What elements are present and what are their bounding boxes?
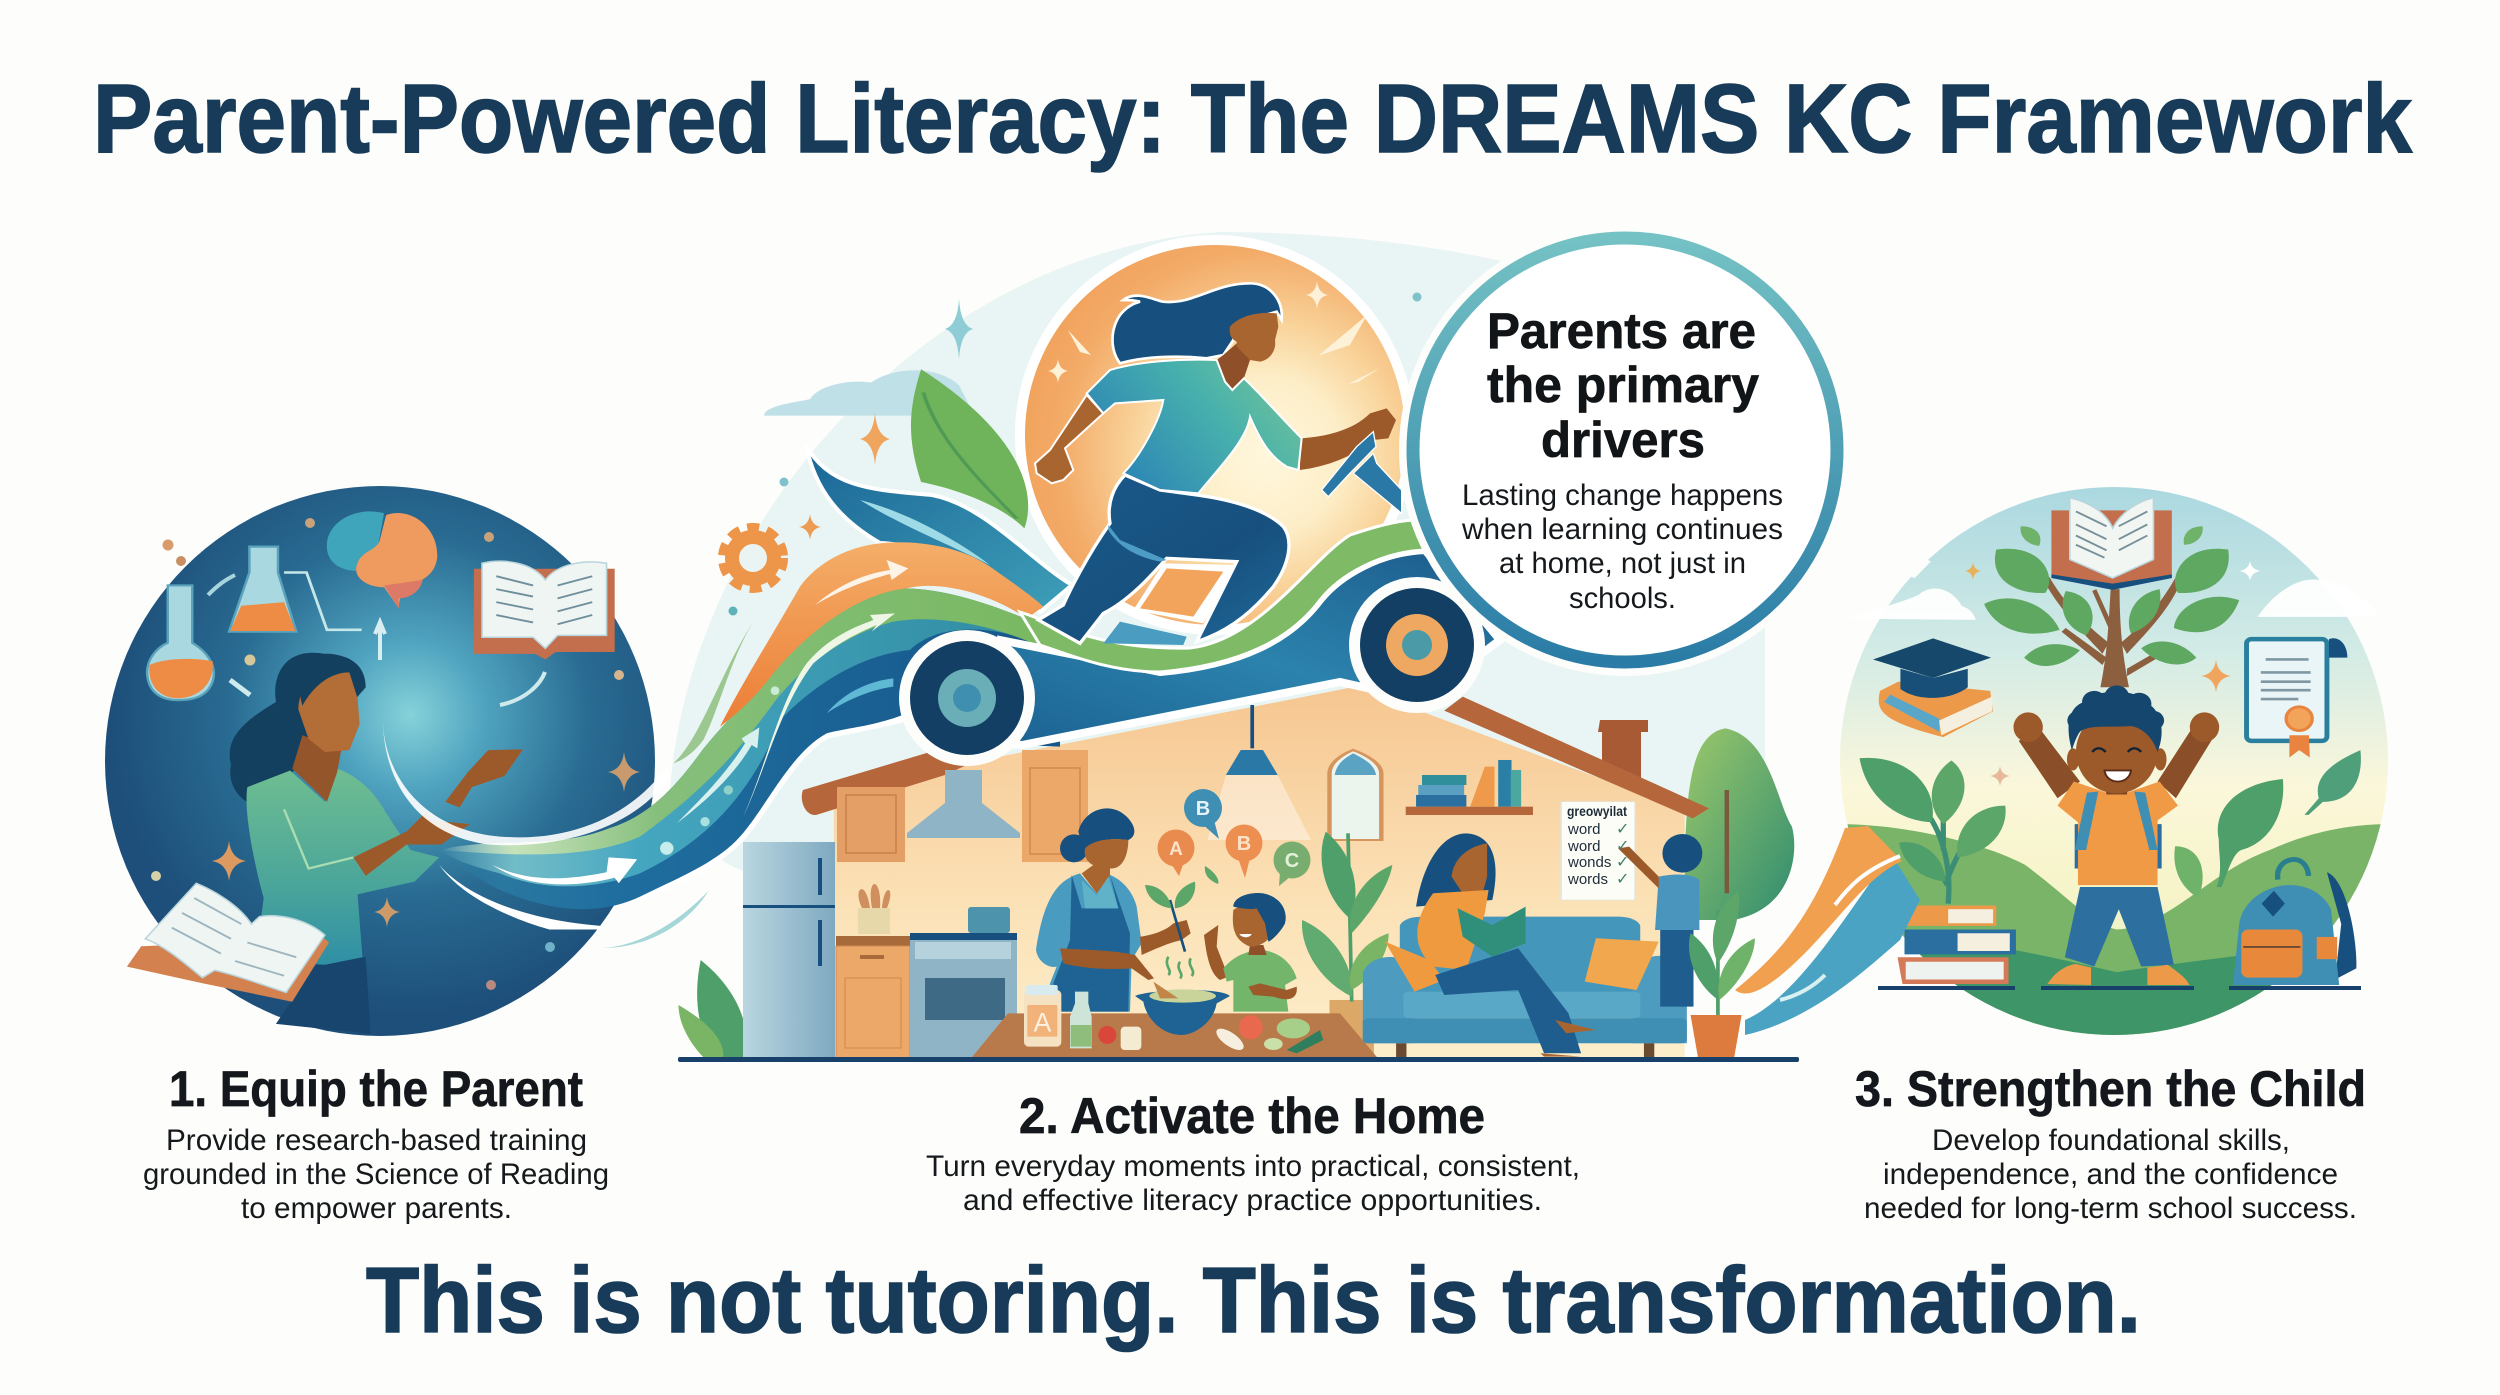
right wheel: [1349, 577, 1485, 713]
icon: diploma: [2247, 638, 2347, 758]
callout circle: [1399, 224, 1851, 676]
panel: equip the parent: [105, 486, 655, 1036]
checklist text: ✓: [1616, 838, 1629, 855]
checklist text: ✓: [1616, 871, 1629, 888]
sparkles and gear: [722, 281, 1422, 616]
right arm: [1300, 408, 1396, 470]
kitchen table with food: A: [1033, 1008, 1051, 1038]
icon: backpack: [2233, 859, 2356, 985]
step 3 heading: 3. Strengthen the Child: [1855, 1061, 2366, 1117]
closing statement: This is not tutoring. This is transformation.: [366, 1248, 2141, 1352]
flowing ribbon from parent to car: [440, 588, 1060, 909]
child with raised arms: [2013, 685, 2219, 985]
icon: open book bottom: [127, 883, 329, 1002]
step 1 description: Provide research-based training: [166, 1124, 587, 1157]
blue sofa: [1363, 917, 1687, 1058]
panel: activate the home: [670, 232, 1799, 1062]
icon: round flask: [147, 585, 214, 700]
checklist text: words: [1567, 871, 1608, 888]
panel: strengthen the child: [1735, 487, 2388, 1042]
running parent figure: [1035, 283, 1402, 645]
step 3 description: Develop foundational skills,: [1932, 1124, 2290, 1157]
shirt: [1087, 360, 1302, 493]
cooking parent: [1036, 808, 1195, 1012]
plant outside left: [678, 960, 747, 1058]
callout heading: [1487, 303, 1759, 468]
kitchen table with food: [971, 957, 1378, 1058]
child helping: [1204, 893, 1297, 1012]
callout body: at home, not just in: [1499, 547, 1746, 580]
potted plant right: [1689, 892, 1755, 1057]
step 2 description: [926, 1150, 1580, 1217]
step 1 heading: 1. Equip the Parent: [169, 1061, 583, 1117]
step 2 description: and effective literacy practice opportunities.: [963, 1184, 1542, 1217]
blue wave leaf: [806, 445, 1072, 612]
flowing ribbon into child circle: [1735, 826, 1920, 1035]
parent reading on sofa: [1416, 833, 1596, 1057]
potted plant middle: [1302, 832, 1392, 1057]
orange band: [720, 542, 1043, 727]
alphabet speech bubbles: B: [1196, 798, 1210, 820]
tree with leaves: [1984, 526, 2239, 687]
alphabet speech bubbles: [1158, 789, 1310, 886]
right side plants: [2174, 750, 2361, 898]
sprouting plant on books: [1860, 758, 2006, 904]
icon: stack of books: [1898, 906, 2016, 984]
child at checklist: [1561, 802, 1702, 1007]
figure: parent teaching: [230, 653, 523, 1034]
step 3 description: independence, and the confidence: [1883, 1158, 2338, 1191]
pants stripe: [1108, 525, 1167, 562]
callout heading: the primary: [1487, 357, 1759, 413]
icon: conical flask: [229, 547, 362, 632]
step 3 description: [1864, 1124, 2357, 1225]
callout heading: Parents are: [1487, 303, 1756, 359]
neck: [1217, 343, 1250, 390]
window: [1330, 750, 1381, 840]
sun circle: [1020, 240, 1410, 630]
sky dome: [670, 232, 1765, 880]
alphabet speech bubbles: C: [1285, 850, 1299, 872]
callout body: [1461, 479, 1783, 615]
sparkles: [1965, 561, 2261, 786]
kitchen: [743, 750, 1088, 1058]
icon: open book top: [474, 561, 615, 659]
callout body: schools.: [1569, 582, 1676, 615]
step 2 heading: 2. Activate the Home: [1019, 1088, 1485, 1144]
callout body: when learning continues: [1461, 513, 1783, 546]
clouds: [1847, 547, 2380, 620]
icon: open book on tree: [2051, 498, 2172, 590]
green leaf: [911, 369, 1028, 528]
lamp: [1207, 705, 1311, 840]
alphabet speech bubbles: B: [1237, 833, 1251, 855]
checklist text: ✓: [1616, 821, 1629, 838]
pants: [1038, 475, 1289, 643]
icon: brain: [327, 511, 437, 609]
step 3 description: needed for long-term school success.: [1864, 1192, 2357, 1225]
checklist text: greowyilat: [1567, 803, 1627, 819]
house wall: [834, 687, 1685, 1058]
decorative sparkles and dots: [151, 518, 640, 990]
checklist text: word: [1567, 838, 1601, 855]
ground lines: [1878, 986, 2361, 990]
callout body: Lasting change happens: [1462, 479, 1783, 512]
checklist text: [1567, 803, 1629, 888]
car body: [960, 550, 1500, 745]
floor line: [678, 1057, 1799, 1062]
face: [1230, 313, 1278, 362]
alphabet speech bubbles: A: [1169, 839, 1183, 860]
panel: driver hero: [383, 224, 1851, 948]
checklist text: word: [1567, 821, 1601, 838]
step 1 description: [143, 1124, 609, 1225]
icon: graduation cap on books: [1873, 638, 1993, 737]
right roof slope: [1444, 697, 1709, 818]
white arrows on ribbon: [660, 560, 908, 855]
circle background with hills: [1840, 487, 2388, 1042]
step 1 description: to empower parents.: [241, 1192, 512, 1225]
roof and chimney: [802, 696, 1708, 820]
tree beside house: [1685, 728, 1794, 920]
checklist text: ✓: [1616, 854, 1629, 871]
shelf with books: [1406, 760, 1533, 815]
checklist text: wonds: [1567, 854, 1611, 871]
cloud left: [764, 370, 975, 416]
callout heading: drivers: [1541, 412, 1705, 468]
left arm: [1035, 395, 1103, 483]
white swooshes and arrow on ribbon: [383, 720, 709, 948]
steering handle: [1322, 432, 1402, 513]
green band over car: [1020, 520, 1425, 672]
gap between legs: [1133, 563, 1237, 623]
step 1 description: grounded in the Science of Reading: [143, 1158, 609, 1191]
left wheel: [899, 630, 1035, 766]
hair: [1112, 283, 1282, 363]
circle background: [105, 486, 655, 1036]
step 2 description: Turn everyday moments into practical, consistent,: [926, 1150, 1580, 1183]
